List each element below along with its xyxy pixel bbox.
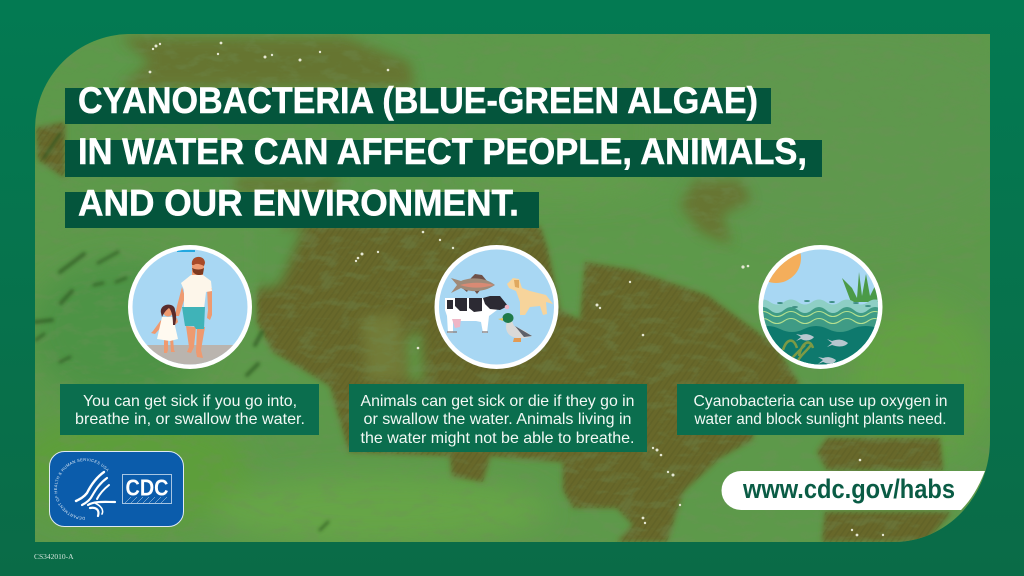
title <box>65 80 822 228</box>
duck <box>498 313 532 342</box>
water layers <box>763 300 878 364</box>
title line 1: CYANOBACTERIA (BLUE-GREEN ALGAE) <box>78 80 758 121</box>
caption: animals <box>349 384 647 452</box>
caption: environment: Cyanobacteria can use up oxygen in <box>694 393 948 410</box>
HHS eagle <box>76 472 115 516</box>
HHS seal text: DEPARTMENT OF HEALTH & HUMAN SERVICES USA <box>54 458 108 520</box>
child <box>151 305 178 353</box>
caption: environment <box>677 384 964 435</box>
seaweed <box>783 341 813 364</box>
green inclusions inside the bloom <box>255 226 424 382</box>
website pill: www.cdc.gov/habs <box>742 474 955 504</box>
fish <box>451 274 495 294</box>
fish <box>796 334 814 341</box>
publication code: CS342010-A <box>34 552 74 561</box>
caption: people: breathe in, or swallow the water. <box>75 411 305 428</box>
title line 2: IN WATER CAN AFFECT PEOPLE, ANIMALS, <box>78 131 807 172</box>
icon: fish, cow, dog and duck <box>434 245 558 369</box>
plants <box>842 272 880 302</box>
caption: people <box>60 384 319 435</box>
cow <box>445 296 509 333</box>
man <box>175 257 212 358</box>
sun <box>768 253 801 283</box>
CDC and HHS logo <box>49 451 184 527</box>
icon: man and child walking <box>128 245 252 375</box>
icon: water layers, sun and plants <box>758 245 882 369</box>
caption: people: You can get sick if you go into, <box>83 393 297 410</box>
caption: animals: Animals can get sick or die if they go in <box>360 393 634 410</box>
title line 3: AND OUR ENVIRONMENT. <box>78 182 519 224</box>
dog <box>507 278 553 315</box>
caption: environment: water and block sunlight plants need. <box>694 411 946 428</box>
caption: animals: or swallow the water. Animals living in <box>364 411 632 428</box>
caption: animals: the water might not be able to breathe. <box>360 430 634 447</box>
CDC mark: CDC <box>126 474 169 500</box>
